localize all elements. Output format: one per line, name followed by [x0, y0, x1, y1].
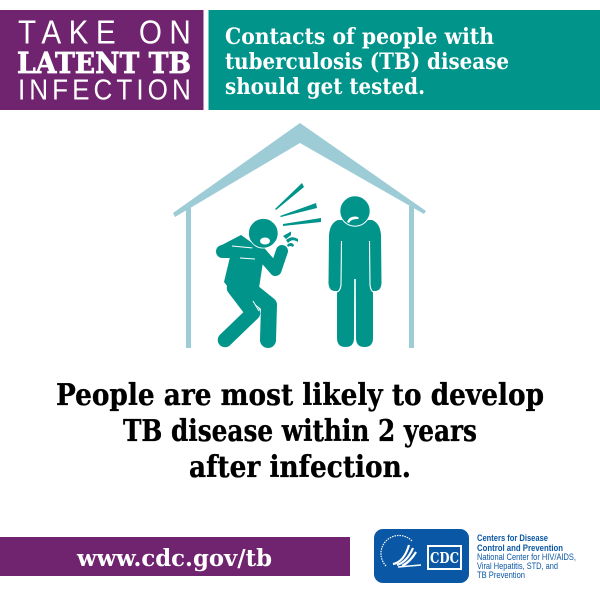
- title: take on: TAKE ON: [18, 14, 191, 51]
- silhouette: [328, 220, 382, 347]
- legs: [225, 288, 269, 340]
- torso: [224, 235, 263, 297]
- main statement: after infection.: [189, 450, 411, 485]
- panel: contacts message: [208, 10, 600, 110]
- organization text: Viral Hepatitis, STD, and: [477, 561, 558, 572]
- organization text: Control and Prevention: [477, 543, 563, 554]
- message text: [225, 24, 509, 100]
- organization text: National Center for HIV/AIDS,: [477, 552, 576, 563]
- logo: CDC box: CDC: [430, 550, 459, 567]
- organization text: TB Prevention: [477, 570, 525, 581]
- icon: coughing person: [216, 183, 321, 340]
- website url: www.cdc.gov/tb: [76, 545, 272, 572]
- message text: tuberculosis (TB) disease: [225, 49, 509, 75]
- organization text: Centers for Disease: [477, 533, 548, 544]
- main statement: People are most likely to develop: [56, 378, 544, 413]
- message text: Contacts of people with: [225, 24, 494, 50]
- message text: should get tested.: [225, 74, 425, 100]
- raised arm: [258, 250, 282, 270]
- main statement: TB disease within 2 years: [123, 414, 477, 449]
- title: infection: INFECTION: [18, 73, 191, 106]
- head: [340, 196, 370, 226]
- panel: website banner: [0, 537, 350, 576]
- main statement: [56, 378, 544, 485]
- folded arm: [216, 235, 257, 259]
- title: latent tb: LATENT TB: [17, 46, 191, 80]
- head: [248, 218, 278, 248]
- logo: CDC: [374, 529, 469, 583]
- icon: standing person: [328, 196, 382, 347]
- panel: campaign title: [0, 10, 204, 110]
- logo: HHS eagle: [381, 535, 421, 567]
- sad mouth: [347, 217, 359, 223]
- icon: house outline: [173, 123, 426, 348]
- cough lines: [275, 183, 321, 226]
- organization text: [477, 533, 576, 581]
- mouth: [260, 238, 270, 244]
- cough droplets: [283, 232, 298, 247]
